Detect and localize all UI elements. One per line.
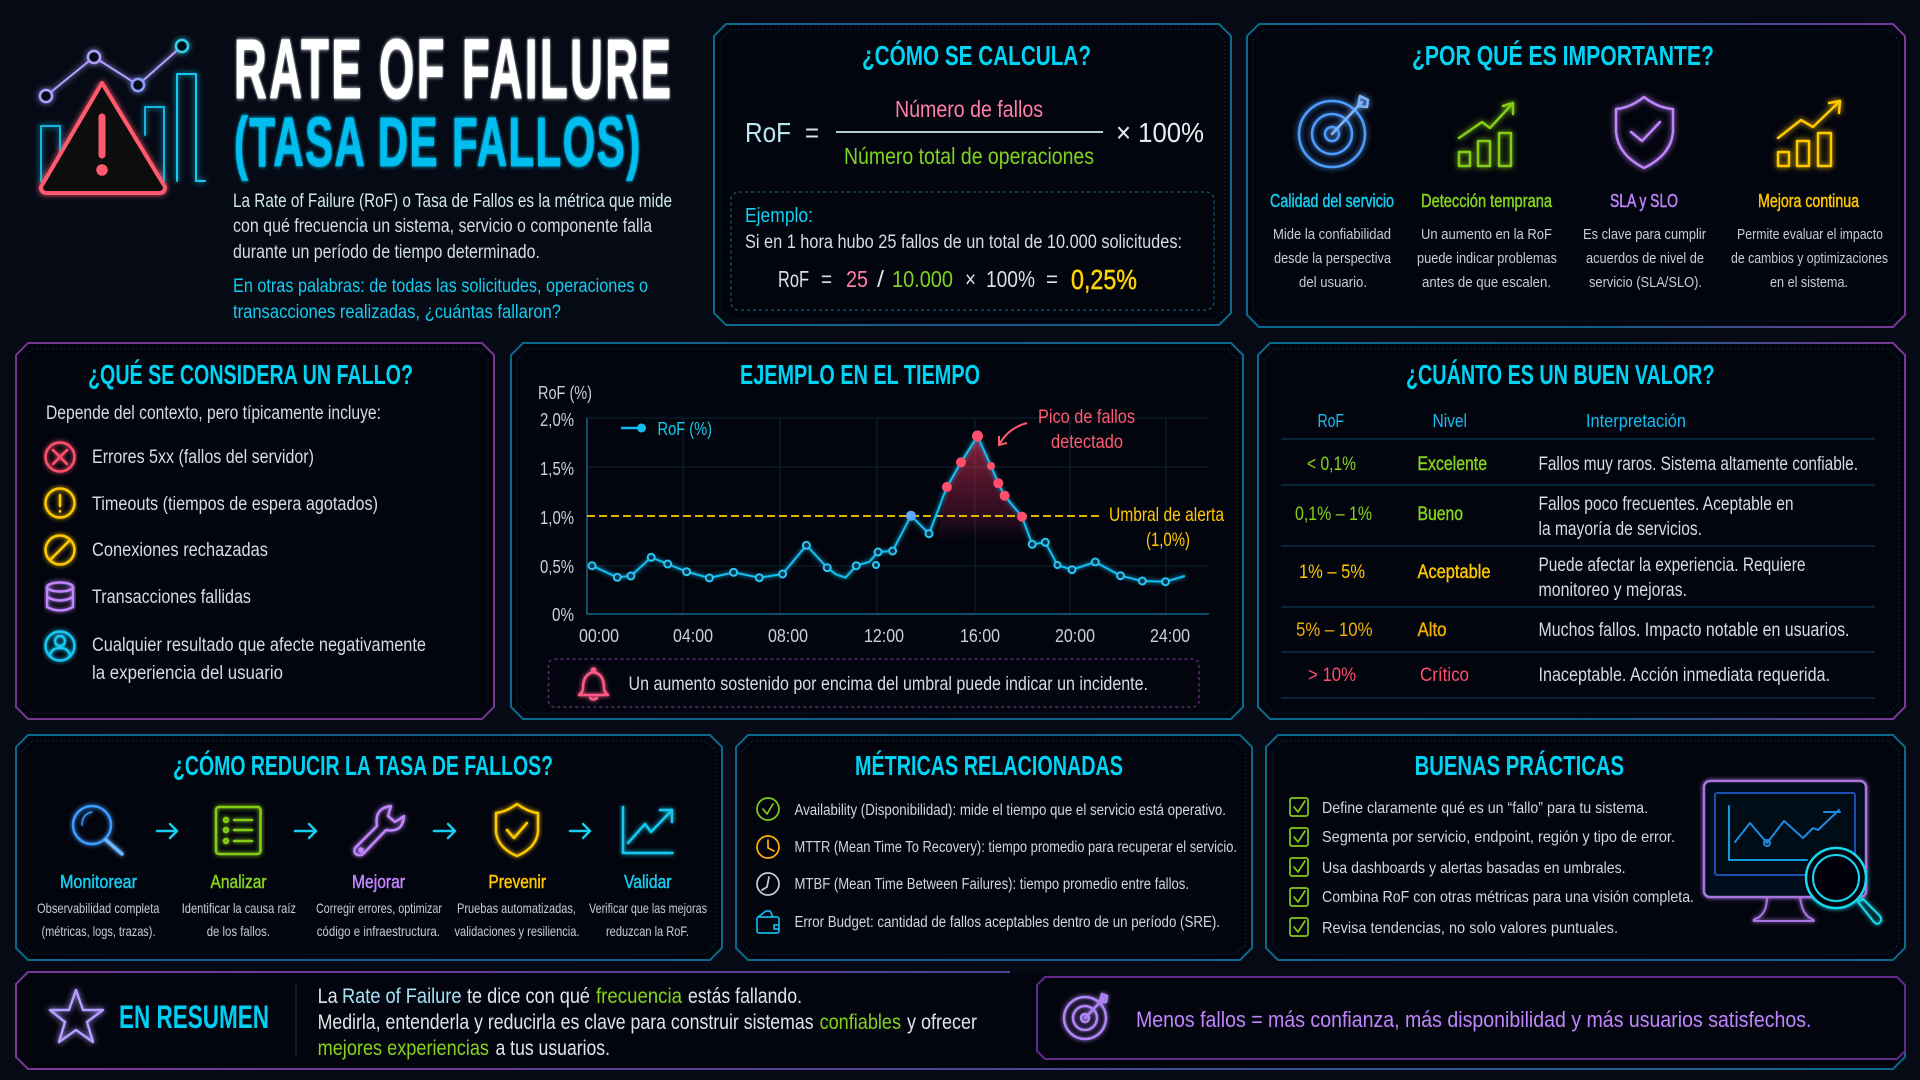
summary text: frecuencia [596, 985, 682, 1008]
item: experiencia del usuario: la experiencia del usuario [92, 663, 283, 684]
item: errores 5xx: Errores 5xx (fallos del servidor) [92, 447, 314, 468]
example box: = [1046, 266, 1058, 292]
step: prevenir: validaciones y resiliencia. [454, 923, 580, 939]
annotation: peak: Pico de fallos [1038, 407, 1135, 428]
metric: MTTR: MTTR (Mean Time To Recovery): tiempo promedio para recuperar el servicio. [794, 839, 1237, 856]
heading: ¿CÓMO REDUCIR LA TASA DE FALLOS? [173, 750, 553, 781]
column: calidad del servicio: Mide la confiabilidad [1273, 226, 1391, 243]
y labels: 1,0% [540, 508, 574, 528]
step: validar: Verificar que las mejoras [589, 900, 707, 916]
x labels: 00:00 [579, 626, 619, 646]
legend: RoF (%) [658, 419, 712, 439]
column: deteccion temprana: Detección temprana [1421, 191, 1553, 211]
panel: buenas practicas [1266, 735, 1905, 960]
heading: EJEMPLO EN EL TIEMPO [740, 359, 980, 390]
example box [731, 192, 1214, 310]
column: SLA y SLO: servicio (SLA/SLO). [1589, 274, 1702, 291]
formula [745, 96, 1204, 169]
formula: Número total de operaciones [844, 143, 1094, 169]
threshold line [587, 515, 1100, 517]
metric: MTTR [757, 836, 1237, 858]
y labels: 1,5% [540, 459, 574, 479]
summary text: Medirla, entenderla y reducirla es clave para construir sistemas [318, 1011, 814, 1034]
item 5: Revisa tendencias, no solo valores puntuales. [1322, 920, 1618, 937]
title: (TASA DE FALLOS) [234, 104, 640, 182]
annotation: peak: detectado [1051, 432, 1123, 453]
item: transacciones fallidas: Transacciones fallidas [92, 587, 251, 608]
example box: RoF [778, 266, 809, 292]
intro description: La Rate of Failure (RoF) o Tasa de Fallos es la métrica que mide [233, 191, 672, 212]
icon: monitor with magnifier [1704, 781, 1881, 924]
table header: Nivel [1432, 411, 1467, 431]
item: experiencia del usuario [46, 632, 426, 684]
row: alto: Alto [1418, 620, 1446, 641]
row: aceptable: Puede afectar la experiencia. Requiere [1538, 555, 1806, 576]
step: validar [589, 807, 707, 939]
title [234, 23, 671, 182]
x labels: 08:00 [768, 626, 808, 646]
panel: que se considera un fallo [16, 343, 494, 719]
item: conexiones rechazadas [46, 536, 268, 564]
item: experiencia del usuario: Cualquier resultado que afecte negativamente [92, 635, 426, 656]
column: deteccion temprana: Un aumento en la RoF [1421, 226, 1552, 243]
column: mejora continua: en el sistema. [1770, 274, 1848, 291]
intro description [233, 191, 672, 323]
takeaway text: Menos fallos = más confianza, más disponibilidad y más usuarios satisfechos. [1136, 1007, 1812, 1032]
callout: incident [548, 659, 1199, 707]
intro description: transacciones realizadas, ¿cuántas fallaron? [233, 302, 561, 323]
heading: BUENAS PRÁCTICAS [1415, 750, 1624, 781]
column: SLA y SLO [1583, 97, 1706, 291]
x labels: 04:00 [673, 626, 713, 646]
x labels: 16:00 [960, 626, 1000, 646]
metric: availability [757, 798, 1226, 820]
panel: metricas relacionadas [736, 735, 1252, 960]
column: calidad del servicio: Calidad del servicio [1270, 191, 1394, 211]
data markers [588, 530, 1169, 585]
panel: como reducir [16, 735, 722, 960]
column: mejora continua: de cambios y optimizaciones [1731, 250, 1888, 267]
table header: Interpretación [1586, 411, 1686, 431]
summary text: La [318, 985, 338, 1008]
formula: × 100% [1116, 117, 1204, 148]
callout: incident: Un aumento sostenido por encima del umbral puede indicar un incidente. [628, 674, 1148, 695]
icon: bell [579, 668, 608, 700]
metric: MTBF: MTBF (Mean Time Between Failures): tiempo promedio entre fallos. [794, 876, 1189, 893]
step: mejorar: Corregir errores, optimizar [316, 900, 442, 916]
icon: target [1299, 96, 1368, 167]
row: excelente: < 0,1% [1307, 454, 1356, 475]
step: validar: Validar [624, 872, 672, 892]
summary text: y ofrecer [907, 1011, 977, 1034]
item: errores 5xx [46, 442, 314, 472]
row: aceptable: monitoreo y mejoras. [1538, 580, 1687, 601]
row: critico: Crítico [1420, 665, 1469, 686]
column: SLA y SLO: acuerdos de nivel de [1586, 250, 1704, 267]
example box: 10.000 [892, 266, 953, 292]
table header [1318, 411, 1686, 431]
step: analizar: Identificar la causa raíz [182, 900, 296, 916]
item: timeouts: Timeouts (tiempos de espera agotados) [92, 494, 378, 515]
formula: RoF [745, 117, 791, 148]
example box: Si en 1 hora hubo 25 fallos de un total de 10.000 solicitudes: [745, 232, 1182, 253]
step: prevenir [454, 804, 580, 939]
metric: availability: Availability (Disponibilidad): mide el tiempo que el servicio está operativo. [794, 802, 1226, 819]
column: deteccion temprana: puede indicar problemas [1417, 250, 1557, 267]
step: mejorar: código e infraestructura. [317, 923, 440, 939]
step: monitorear: (métricas, logs, trazas). [42, 923, 156, 939]
intro description: En otras palabras: de todas las solicitudes, operaciones o [233, 276, 648, 297]
example box: 0,25% [1071, 264, 1137, 295]
x labels: 20:00 [1055, 626, 1095, 646]
row: critico: Inaceptable. Acción inmediata requerida. [1538, 665, 1830, 686]
row: alto [1296, 620, 1850, 641]
metric: error budget: Error Budget: cantidad de fallos aceptables dentro de un período (SRE). [794, 914, 1220, 931]
divider [295, 985, 297, 1055]
row: bueno: la mayoría de servicios. [1538, 519, 1702, 540]
example box: 25 [846, 266, 868, 292]
heading: MÉTRICAS RELACIONADAS [855, 750, 1123, 781]
row: critico [1308, 665, 1830, 686]
y labels: 0,5% [540, 557, 574, 577]
example box: 100% [986, 266, 1035, 292]
formula: = [805, 117, 819, 148]
x labels: 12:00 [864, 626, 904, 646]
example box: = [821, 266, 832, 292]
row: critico: > 10% [1308, 665, 1356, 686]
heading: ¿POR QUÉ ES IMPORTANTE? [1412, 40, 1714, 71]
row: aceptable: Aceptable [1418, 562, 1490, 583]
step: prevenir: Pruebas automatizadas, [457, 900, 576, 916]
column: calidad del servicio: del usuario. [1299, 274, 1367, 291]
heading: en resumen: EN RESUMEN [119, 999, 269, 1035]
y labels: 0% [552, 605, 574, 625]
icon: growth chart yellow [1778, 101, 1840, 166]
summary text [318, 985, 977, 1060]
arrow [157, 824, 177, 838]
example box: × [965, 266, 976, 292]
column: SLA y SLO: SLA y SLO [1610, 191, 1678, 211]
panel: como se calcula [714, 24, 1231, 325]
step: validar: reduzcan la RoF. [606, 923, 689, 939]
step: monitorear: Monitorear [60, 872, 137, 892]
table [1281, 411, 1875, 698]
metric: error budget [757, 911, 1220, 933]
annotation: threshold: (1,0%) [1146, 530, 1190, 551]
item: timeouts [46, 488, 378, 518]
y axis title: RoF (%) [538, 383, 592, 403]
column: calidad del servicio [1270, 96, 1394, 291]
annotation: threshold: Umbral de alerta [1109, 505, 1224, 526]
grid [587, 418, 1209, 614]
checklist [1290, 798, 1694, 937]
row: bueno: 0,1% – 1% [1295, 504, 1372, 525]
panel: en resumen [16, 972, 1905, 1069]
step: analizar: Analizar [210, 872, 267, 892]
panel: takeaway [1037, 977, 1905, 1059]
example box: / [877, 266, 885, 292]
peak markers [942, 430, 1027, 522]
arrow [295, 824, 316, 838]
x labels [579, 626, 1190, 646]
example box: Ejemplo: [745, 205, 813, 227]
header: warning and chart icon [40, 40, 205, 193]
row: alto: 5% – 10% [1296, 620, 1373, 641]
icon: shield check [1616, 97, 1673, 168]
column: deteccion temprana [1417, 103, 1557, 291]
icon: star [50, 990, 103, 1042]
metric: MTBF [757, 873, 1189, 895]
step: analizar [182, 807, 296, 939]
item: transacciones fallidas [47, 582, 251, 610]
step: monitorear: Observabilidad completa [37, 900, 160, 916]
column: mejora continua [1731, 101, 1888, 291]
intro text: Depende del contexto, pero típicamente incluye: [46, 403, 381, 424]
x labels: 24:00 [1150, 626, 1190, 646]
row: alto: Muchos fallos. Impacto notable en usuarios. [1538, 620, 1850, 641]
step: monitorear [37, 806, 160, 939]
step: mejorar: Mejorar [352, 872, 405, 892]
item 1: Define claramente qué es un “fallo” para tu sistema. [1322, 800, 1648, 817]
y labels: 2,0% [540, 410, 574, 430]
icon: growth chart green [1459, 103, 1513, 166]
line chart [538, 383, 1224, 646]
heading: ¿CUÁNTO ES UN BUEN VALOR? [1406, 359, 1714, 390]
summary text: estás fallando. [688, 985, 802, 1008]
column: SLA y SLO: Es clave para cumplir [1583, 226, 1706, 243]
formula: Número de fallos [895, 96, 1043, 122]
step: analizar: de los fallos. [207, 923, 270, 939]
step: prevenir: Prevenir [488, 872, 546, 892]
column: deteccion temprana: antes de que escalen. [1422, 274, 1551, 291]
panel: cuanto es un buen valor [1258, 343, 1905, 719]
summary text: a tus usuarios. [496, 1037, 610, 1060]
row: excelente [1307, 454, 1858, 475]
column: mejora continua: Mejora continua [1758, 191, 1860, 211]
row: aceptable [1299, 555, 1806, 601]
intro description: durante un período de tiempo determinado. [233, 242, 540, 263]
title: RATE OF FAILURE [234, 23, 671, 117]
heading: ¿CÓMO SE CALCULA? [862, 40, 1091, 71]
legend [621, 419, 712, 439]
data line [592, 436, 1185, 582]
arrow [570, 824, 590, 838]
row: bueno: Bueno [1418, 504, 1463, 525]
annotation: threshold [1109, 505, 1224, 551]
summary text: Rate of Failure [342, 985, 462, 1008]
peak area [936, 436, 1030, 540]
column: mejora continua: Permite evaluar el impacto [1737, 226, 1883, 243]
summary text: confiables [820, 1011, 901, 1034]
row: excelente: Excelente [1418, 454, 1487, 475]
item: conexiones rechazadas: Conexiones rechazadas [92, 540, 268, 561]
panel: ejemplo en el tiempo [511, 343, 1243, 719]
item 3: Usa dashboards y alertas basadas en umbrales. [1322, 860, 1626, 877]
step: mejorar [316, 806, 442, 939]
arrow [434, 824, 455, 838]
annotation: peak [999, 407, 1135, 453]
summary text: te dice con qué [467, 985, 590, 1008]
panel: por que es importante [1247, 24, 1905, 327]
item 2: Segmenta por servicio, endpoint, región y tipo de error. [1322, 829, 1675, 846]
intro description: con qué frecuencia un sistema, servicio o componente falla [233, 216, 652, 237]
row: aceptable: 1% – 5% [1299, 562, 1365, 583]
summary text: mejores experiencias [318, 1037, 489, 1060]
item 4: Combina RoF con otras métricas para una visión completa. [1322, 889, 1694, 906]
row: bueno: Fallos poco frecuentes. Aceptable en [1538, 494, 1794, 515]
column: calidad del servicio: desde la perspectiva [1274, 250, 1392, 267]
y labels [540, 410, 574, 625]
heading: ¿QUÉ SE CONSIDERA UN FALLO? [88, 359, 413, 390]
row: bueno [1295, 494, 1794, 540]
table header: RoF [1318, 411, 1344, 431]
icon: target [1064, 994, 1107, 1039]
